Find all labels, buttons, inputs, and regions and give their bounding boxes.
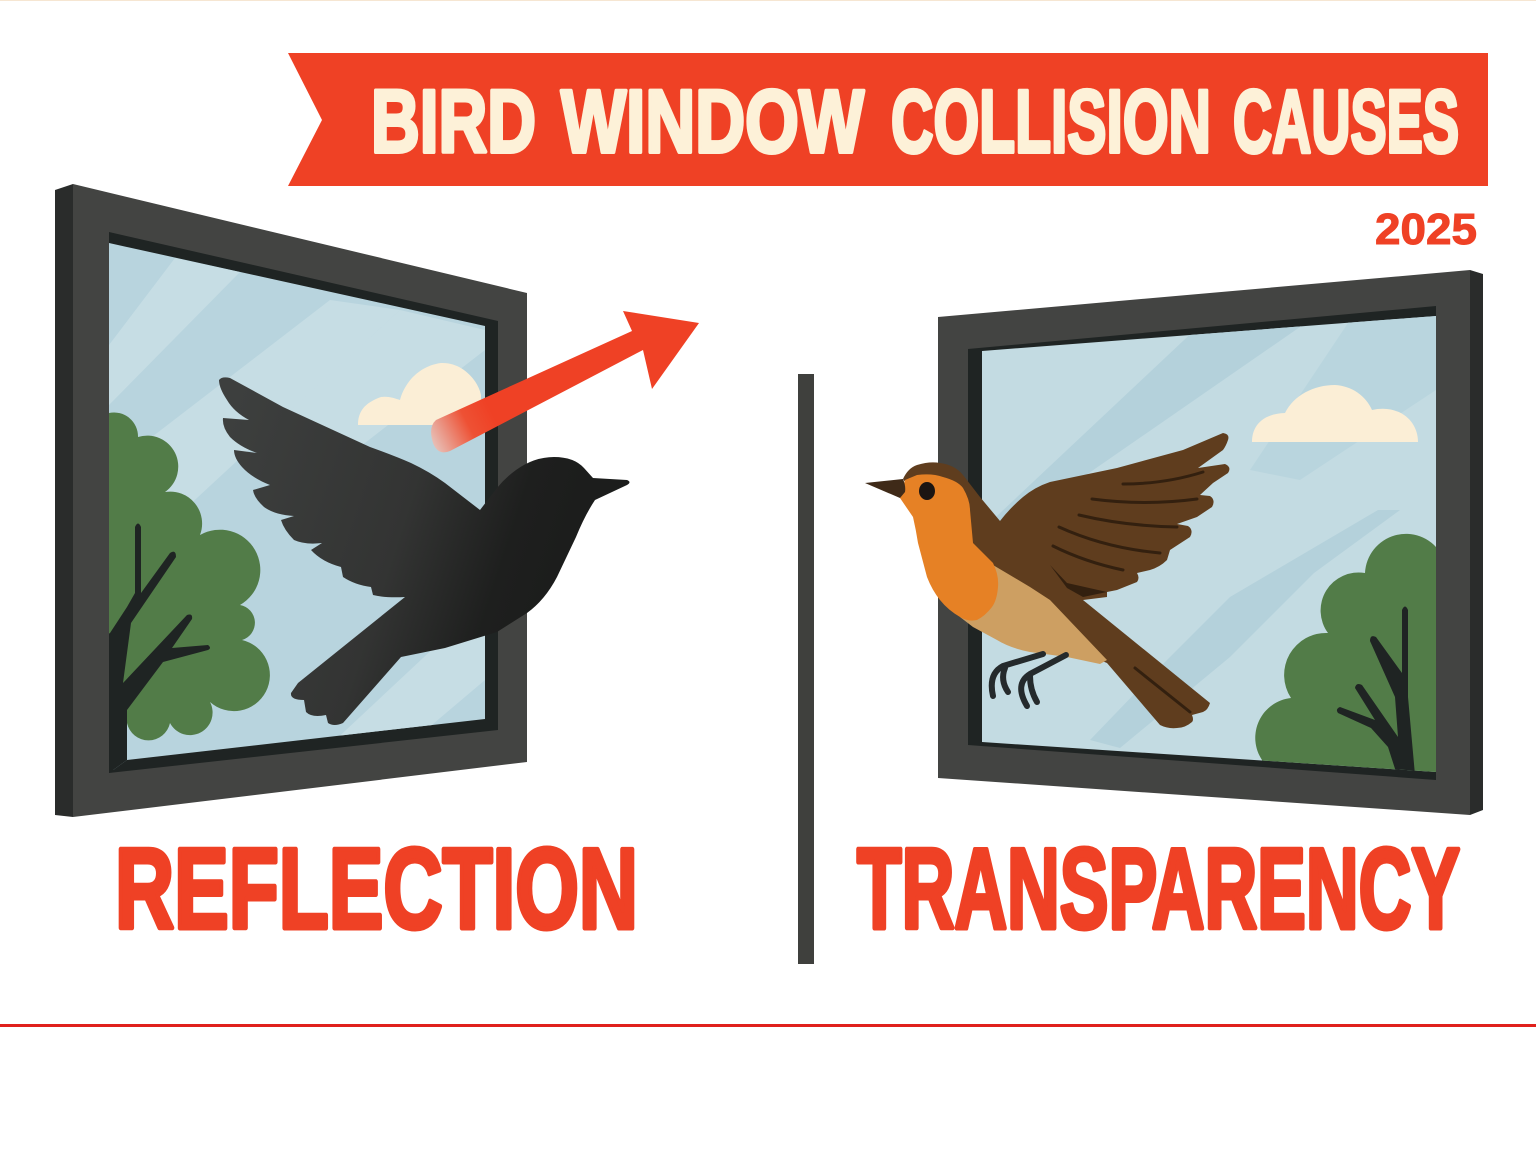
arrow (431, 311, 699, 452)
eye (919, 482, 935, 500)
divider (798, 374, 814, 964)
orange breast (900, 474, 998, 621)
feather lines (1053, 472, 1203, 712)
cloud (358, 363, 481, 425)
cloud (1252, 385, 1418, 442)
tan belly (960, 565, 1107, 664)
title banner (288, 53, 1488, 186)
beak (865, 479, 905, 498)
title (371, 71, 1459, 171)
label: reflection: REFLECTION (115, 826, 638, 953)
reflected sky (100, 230, 500, 780)
title: BIRD (371, 71, 536, 171)
panel: transparency window (938, 270, 1483, 815)
icon: black bird silhouette (219, 377, 630, 725)
title: COLLISION (891, 71, 1211, 171)
tree (1255, 534, 1440, 785)
brown body and wing (903, 433, 1229, 728)
title: WINDOW (561, 71, 864, 171)
panel: reflection window (55, 184, 527, 817)
tree (100, 412, 270, 740)
year: 2025 (1375, 205, 1477, 254)
tree trunk (1337, 606, 1415, 775)
legs (992, 654, 1066, 706)
tree trunk (105, 524, 210, 780)
view through glass (982, 316, 1436, 772)
icon: robin (865, 433, 1229, 728)
